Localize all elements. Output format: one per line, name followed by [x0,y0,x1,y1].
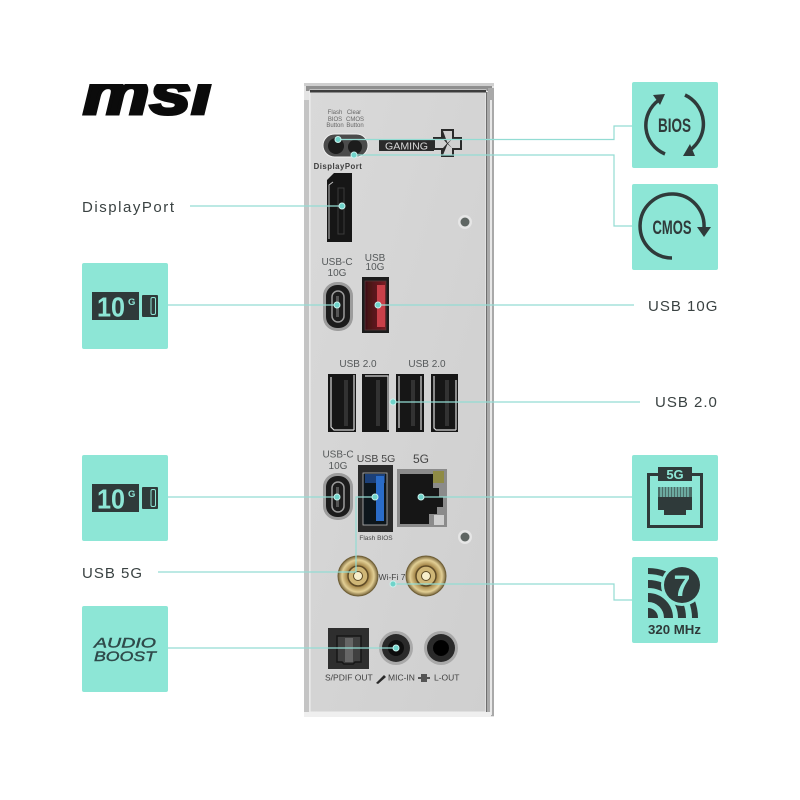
connector line: USB-C lower [168,494,340,500]
icon tile: 10G lower [82,455,168,541]
connector line: USB 2.0 [390,399,640,405]
label: USB 5G: USB 5G [82,565,143,582]
USB 2.0 labels [339,359,446,370]
connector line: audio boost [168,645,399,651]
screw upper [458,215,472,229]
connector line: BIOS [335,126,632,142]
icon tile: CMOS: CMOS [652,218,692,239]
BIOS and CMOS button labels [326,110,364,129]
antenna connector right [406,556,446,596]
USB-C 10G label lower [322,450,354,472]
BIOS and CMOS button labels: Clear [347,110,361,116]
icon tile: 5G LAN [632,455,718,541]
connector line: USB 5G [158,494,378,572]
connector line: LAN [418,494,632,500]
icon tile: BIOS: BIOS [658,116,691,137]
S/PDIF port [328,628,369,669]
icon tile: Audio Boost: AUDIO [93,634,156,650]
USB-C port lower [323,473,353,520]
connector line: CMOS [351,152,632,226]
Gaming badge: GAMING [385,142,428,152]
panel frame [304,83,494,717]
USB-C 10G label upper [321,257,353,279]
USB-C port upper [323,282,353,331]
screw lower [458,530,472,544]
USB-C 10G label lower: 10G [329,461,348,472]
Wi-Fi 7 label: Wi-Fi 7 [379,572,406,582]
icon tile: 5G LAN: 5G [666,467,684,482]
USB-C 10G label upper: 10G [328,268,347,279]
USB 10G label: USB [365,253,386,264]
icon tile: BIOS [632,82,718,168]
BIOS and CMOS button labels: Flash [328,110,342,116]
icon tile: 10G upper: 10 [97,292,125,322]
Gaming badge [379,129,462,157]
mic-in jack [379,631,413,665]
icon tile: Wi-Fi 7 320 MHz [632,557,718,643]
DisplayPort connector [327,173,352,242]
label: DisplayPort: DisplayPort [82,199,175,216]
BIOS and CMOS buttons [323,134,368,157]
USB-C 10G label lower: USB-C [322,450,354,460]
USB 2.0 labels: USB 2.0 [339,359,377,370]
connector line: Wi-Fi [390,581,632,600]
icon tile: 10G lower: 10 [97,484,125,514]
icon tile: Wi-Fi 7 320 MHz: 7 [674,570,690,603]
BIOS and CMOS button labels: BIOS [328,117,342,123]
icon tile: 10G upper: G [128,297,135,308]
USB 10G red port [362,277,389,333]
BIOS and CMOS button labels: Button [346,123,364,129]
DisplayPort label on panel: DisplayPort [314,162,362,171]
icon tile: 10G upper [82,263,168,349]
USB 10G label [365,253,386,273]
Flash BIOS label: Flash BIOS [359,535,393,542]
icon tile: 10G lower: G [128,489,135,500]
USB 5G label on panel: USB 5G [357,453,395,465]
audio labels: S/PDIF OUT [325,672,373,682]
audio labels: L-OUT [434,672,460,682]
audio labels [325,672,460,684]
antenna connector left [338,556,378,596]
LAN port [397,469,447,527]
line-out jack [424,631,458,665]
audio labels: MIC-IN [388,672,415,682]
USB-C 10G label upper: USB-C [321,257,353,268]
icon tile: Audio Boost: BOOST [94,648,158,664]
BIOS and CMOS button labels: Button [326,123,344,129]
rear I/O panel [304,83,494,717]
icon tile: Wi-Fi 7 320 MHz: 320 MHz [648,622,701,637]
logo: MSI: msi [83,60,214,127]
label: USB 10G: USB 10G [648,298,718,315]
icon tile: CMOS [632,184,718,270]
BIOS and CMOS button labels: CMOS [346,117,364,123]
5G label: 5G [413,452,429,466]
connector line: DisplayPort [190,203,345,209]
USB 5G blue port [358,465,393,532]
label: USB 2.0: USB 2.0 [655,394,718,411]
USB 2.0 labels: USB 2.0 [408,359,446,370]
USB 10G label: 10G [366,262,385,273]
connector line: USB-C upper [168,302,340,308]
icon tile: Audio Boost [82,606,168,692]
USB 2.0 ports [328,374,458,432]
connector line: USB 10G [375,302,634,308]
